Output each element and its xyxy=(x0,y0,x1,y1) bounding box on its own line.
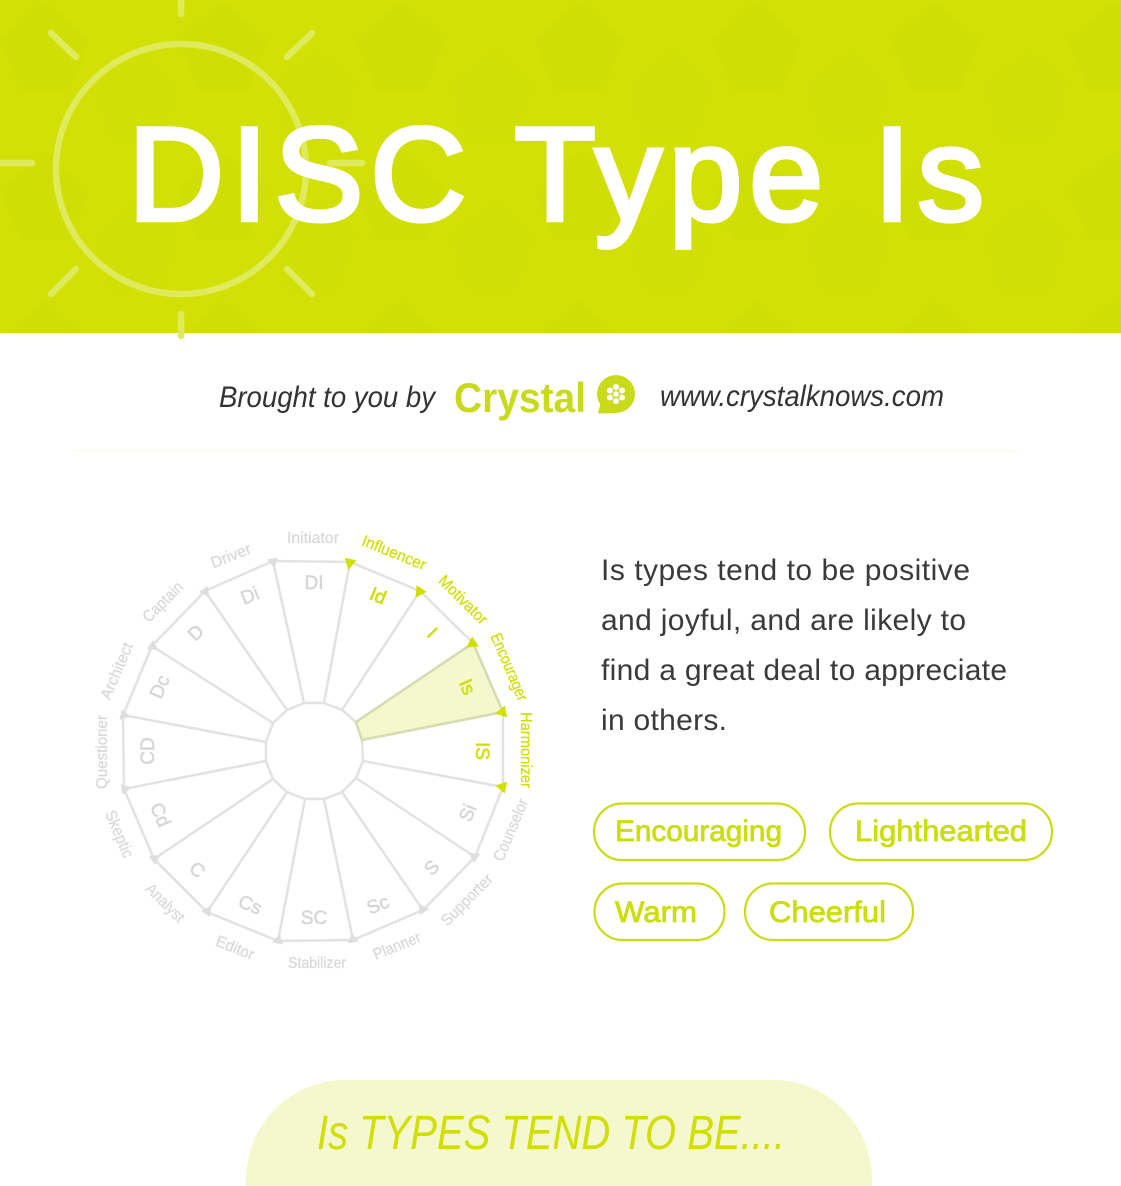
outer role labels: Harmonizer xyxy=(517,712,534,789)
outer role labels: Motivator xyxy=(435,572,491,629)
brought to you by text: Brought to you by xyxy=(219,381,437,414)
DISC wheel chart xyxy=(94,530,534,972)
title: DISC Type Is xyxy=(128,101,984,249)
inner segment codes: S xyxy=(420,856,444,880)
pill: Warm: Warm xyxy=(615,896,697,929)
outer role labels: Questioner xyxy=(94,714,111,789)
inner segment codes xyxy=(138,573,492,929)
icon: Crystal chat bubble flower xyxy=(597,375,635,414)
outer role labels: Influencer xyxy=(359,533,429,574)
pill: Lighthearted: Lighthearted xyxy=(855,815,1027,848)
inner segment codes: Id xyxy=(367,584,389,609)
sponsor line xyxy=(219,374,944,421)
description paragraph: in others. xyxy=(601,704,727,737)
outer role labels: Counselor xyxy=(491,796,532,864)
outer role labels: Initiator xyxy=(287,530,340,547)
pill: Warm xyxy=(594,884,724,940)
pill: Encouraging xyxy=(594,804,805,860)
inner segment codes: Sc xyxy=(364,892,392,919)
outer role labels xyxy=(94,530,534,972)
description paragraph: and joyful, and are likely to xyxy=(601,604,966,637)
pill: Encouraging: Encouraging xyxy=(615,815,782,848)
outer role labels: Planner xyxy=(371,929,424,964)
outer role labels: Stabilizer xyxy=(288,955,347,972)
pill: Cheerful xyxy=(745,884,913,940)
inner segment codes: Cs xyxy=(235,891,265,920)
inner segment codes: SC xyxy=(301,908,327,929)
outer role labels: Analyst xyxy=(142,880,188,927)
inner segment codes: IS xyxy=(471,742,492,760)
website url: www.crystalknows.com xyxy=(660,380,944,413)
inner segment codes: Is xyxy=(454,676,479,698)
header banner xyxy=(0,0,1121,336)
outer role labels: Supporter xyxy=(438,871,497,930)
pill: Lighthearted xyxy=(830,804,1052,860)
outer role labels: Driver xyxy=(209,540,254,572)
outer role labels: Captain xyxy=(140,579,187,626)
inner segment codes: DI xyxy=(304,573,324,594)
inner segment codes: Dc xyxy=(146,672,175,702)
inner segment codes: Si xyxy=(455,801,481,825)
description paragraph: Is types tend to be positive xyxy=(601,554,970,587)
section heading tab xyxy=(246,1080,872,1186)
outer role labels: Editor xyxy=(213,933,257,964)
inner segment codes: D xyxy=(184,621,209,646)
inner segment codes: Di xyxy=(238,583,262,610)
trait pills xyxy=(594,804,1052,940)
pill: Cheerful: Cheerful xyxy=(769,896,886,929)
icon: sun outline xyxy=(0,0,362,336)
inner segment codes: C xyxy=(184,858,209,883)
description paragraph: find a great deal to appreciate xyxy=(601,654,1007,687)
Crystal wordmark: Crystal xyxy=(454,374,586,421)
description paragraph xyxy=(601,554,1007,737)
vertex markers xyxy=(343,558,507,793)
outer role labels: Skeptic xyxy=(101,808,136,861)
inner segment codes: I xyxy=(422,624,441,643)
outer role labels: Encourager xyxy=(487,631,531,704)
inner segment codes: CD xyxy=(138,737,159,765)
highlighted segment: Is xyxy=(356,643,503,740)
inner segment codes: Cd xyxy=(145,800,174,830)
wheel outline and spokes xyxy=(123,561,503,941)
section heading text: Is TYPES TEND TO BE.... xyxy=(317,1107,785,1160)
outer role labels: Architect xyxy=(98,640,137,702)
